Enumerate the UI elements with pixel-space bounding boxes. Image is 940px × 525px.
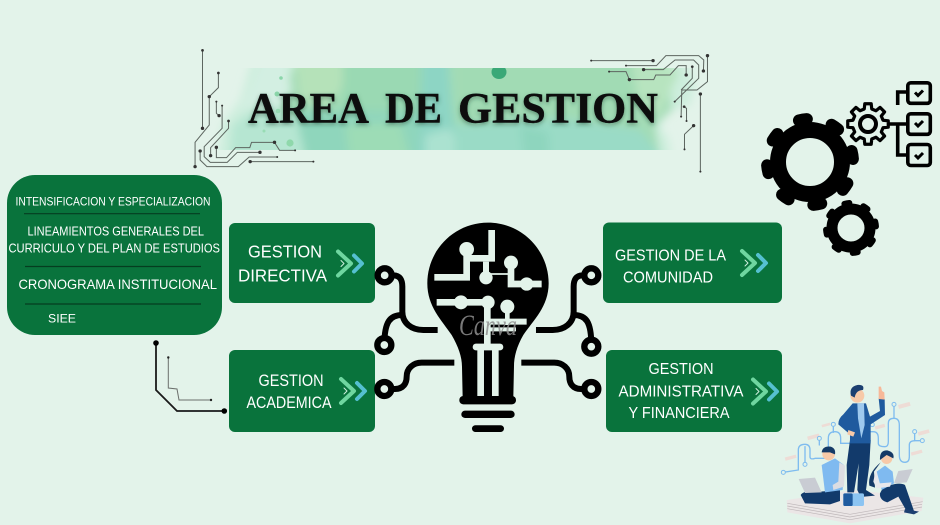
title: DE — [385, 84, 442, 132]
box: gestion de la comunidad — [603, 222, 782, 303]
standing man — [838, 385, 885, 497]
box: gestion academica: ACADEMICA — [246, 394, 332, 412]
list item: lineamientos: LINEAMIENTOS GENERALES DEL — [28, 224, 204, 238]
box: gestion administrativa y financiera: ADMINISTRATIVA — [618, 384, 744, 400]
box: gestion administrativa y financiera: GESTION — [648, 361, 714, 378]
icon: circuit light bulb — [377, 223, 598, 432]
bulb base bars — [459, 396, 516, 432]
icon: large gear — [767, 119, 853, 205]
title — [248, 84, 658, 132]
seated woman — [869, 450, 919, 514]
title: AREA — [248, 84, 370, 132]
circuit branches — [384, 275, 591, 389]
title banner watercolor — [217, 68, 695, 150]
list item: lineamientos — [8, 224, 220, 256]
circuit lines — [783, 404, 922, 472]
box: gestion administrativa y financiera: Y FINANCIERA — [628, 405, 730, 422]
watermark: Canva — [459, 309, 517, 342]
box: gestion directiva: DIRECTIVA — [238, 266, 327, 286]
box: gestion de la comunidad: COMUNIDAD — [623, 270, 713, 286]
icon: chevrons — [338, 252, 362, 276]
icon: chevrons — [742, 251, 766, 275]
box: gestion administrativa y financiera — [606, 350, 782, 432]
box: gestion directiva — [229, 223, 375, 303]
icon: chevrons — [753, 380, 777, 404]
circuit decoration: title right — [590, 54, 709, 173]
list item: cronograma: CRONOGRAMA INSTITUCIONAL — [18, 276, 217, 292]
bulb body — [427, 223, 549, 397]
connector: panel to gestion academica — [153, 340, 227, 414]
seated man — [799, 447, 845, 504]
panel: area list — [7, 175, 222, 335]
box between figures — [843, 493, 864, 506]
list item: siee: SIEE — [48, 312, 76, 326]
box: gestion academica — [229, 350, 375, 432]
box: gestion de la comunidad: GESTION DE LA — [615, 248, 726, 264]
note tags — [785, 402, 930, 461]
circuit end nodes — [377, 268, 598, 396]
icon: small gear — [826, 203, 876, 253]
circuit decoration: title left — [193, 49, 314, 168]
icon: chevrons — [341, 379, 365, 403]
bulb inner circuit — [434, 230, 542, 397]
icon: outline gear with checklist — [848, 83, 930, 166]
platform — [787, 490, 923, 523]
illustration: team working with laptops — [781, 385, 930, 523]
list item: lineamientos: CURRICULO Y DEL PLAN DE ESTUDIOS — [8, 242, 220, 256]
box: gestion directiva: GESTION — [248, 242, 322, 262]
title: GESTION — [458, 84, 658, 132]
list item: intensificacion: INTENSIFICACION Y ESPECIALIZACION — [16, 196, 210, 208]
box: gestion academica: GESTION — [258, 372, 324, 390]
